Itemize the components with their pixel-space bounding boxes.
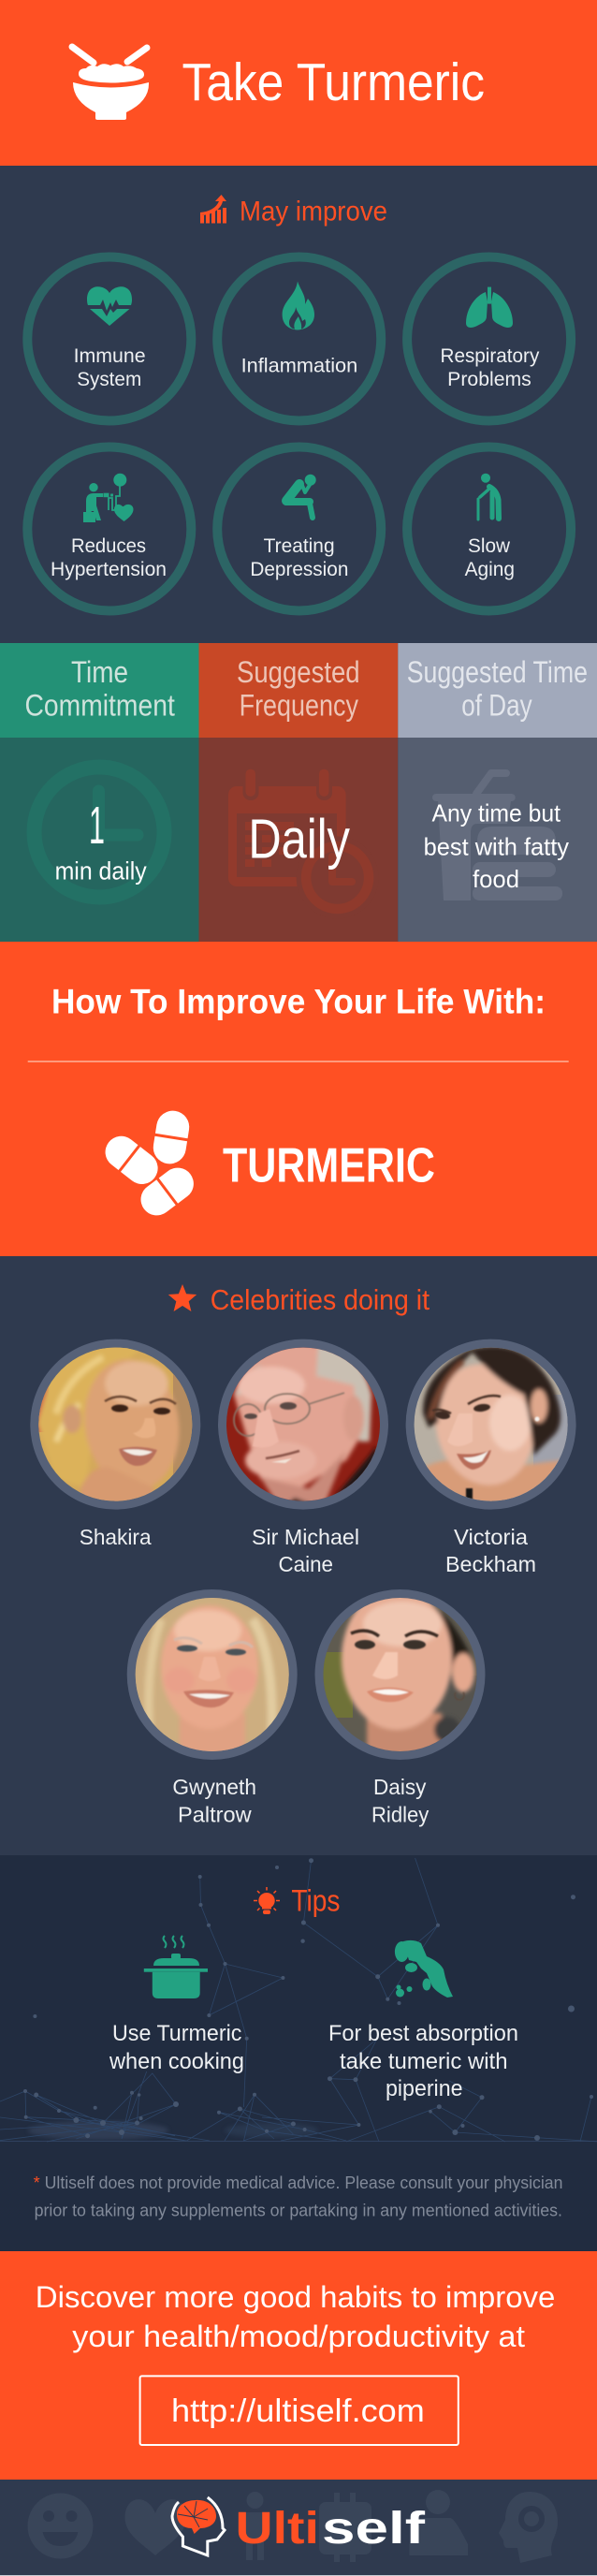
label: Inflammation [241, 356, 357, 377]
heading: suggested frequency: Frequency [240, 689, 358, 723]
label: Slow [468, 535, 511, 557]
panel: suggested time of day [398, 643, 597, 942]
label: System [77, 369, 141, 390]
heading: tips: Tips [291, 1884, 341, 1918]
portrait: Daisy Ridley [314, 1588, 485, 1760]
label: Victoria Beckham: Victoria [454, 1525, 528, 1549]
wordmark: Ulti [236, 2504, 319, 2554]
icon: ghost chip [319, 2493, 371, 2562]
portrait: Shakira [30, 1339, 200, 1510]
icon: flame [283, 281, 314, 329]
panel: footer [0, 2480, 597, 2576]
panel: may improve [0, 166, 597, 643]
label: Problems [447, 369, 531, 390]
heading: time commitment: Commitment [24, 689, 175, 723]
value: any time but best with fatty food: Any time but [432, 799, 561, 827]
benefit: slow aging [407, 447, 571, 610]
label: Gwyneth Paltrow: Gwyneth [172, 1775, 256, 1799]
label: Depression [250, 559, 348, 580]
panel: header [0, 0, 597, 166]
icon: rising chart arrow [200, 195, 226, 223]
portrait: Gwyneth Paltrow [127, 1589, 298, 1760]
benefit: reduces hypertension [27, 447, 191, 610]
icon: heart with pulse [87, 286, 132, 326]
disclaimer: * Ultiself does not provide medical advice. Please consult your physician [34, 2174, 572, 2192]
label: Treating [264, 535, 335, 557]
label: Aging [465, 559, 515, 580]
heading: suggested time of day: of Day [461, 689, 532, 723]
panel: how to improve [0, 942, 597, 1256]
heading: turmeric: TURMERIC [223, 1138, 435, 1193]
icon: lungs [466, 287, 513, 328]
heading: celebrities doing it: Celebrities doing it [211, 1283, 430, 1316]
tip: best absorption with piperine: piperine [386, 2076, 462, 2101]
label: Hypertension [51, 559, 167, 580]
label: Victoria Beckham: Beckham [445, 1552, 536, 1576]
label: Sir Michael Caine: Sir Michael [252, 1525, 359, 1549]
icon: ghost person with tie [241, 2492, 269, 2560]
icon: blood pressure check [83, 474, 133, 522]
text: discover more good habits: your health/mood/productivity at [72, 2320, 525, 2353]
label: Immune [74, 345, 146, 367]
tip: best absorption with piperine: For best absorption [328, 2021, 518, 2046]
value: 1 min daily: min daily [55, 856, 147, 885]
text: discover more good habits: Discover more good habits to improve [36, 2280, 555, 2314]
label: Sir Michael Caine: Caine [279, 1552, 333, 1576]
portrait: Sir Michael Caine [218, 1339, 388, 1510]
icon: sad seated person [286, 475, 316, 518]
icon: ghost person [410, 2490, 468, 2555]
icon: ghost head with gear [499, 2492, 558, 2563]
benefit: immune system [27, 256, 191, 421]
heading: suggested frequency: Suggested [237, 655, 360, 689]
icon: calendar and clock watermark [228, 769, 379, 919]
panel: tips [0, 1855, 597, 2251]
icon: elderly person with cane [478, 474, 499, 520]
button: ultiself url: http://ultiself.com [171, 2393, 425, 2429]
icon: ghost heart [125, 2499, 186, 2555]
panel: suggested frequency [198, 643, 398, 942]
icon: fast food watermark [432, 773, 562, 900]
benefit: treating depression [217, 447, 381, 610]
tip: best absorption with piperine: take tumeric with [340, 2049, 507, 2074]
value: any time but best with fatty food: best with fatty [424, 832, 569, 860]
icon: rice bowl with chopsticks [72, 47, 149, 120]
benefit: inflammation [217, 256, 381, 421]
value: 1 min daily: 1 [89, 796, 105, 856]
portrait: Victoria Beckham [406, 1339, 576, 1510]
label: Daisy Ridley: Daisy [373, 1775, 427, 1799]
value: 1 min daily [55, 796, 147, 885]
benefit: respiratory problems [407, 256, 571, 421]
panel: call to action [0, 2251, 597, 2480]
heading: may improve: May improve [240, 197, 387, 227]
title: Take Turmeric [182, 52, 485, 112]
icon: star [168, 1284, 197, 1311]
icon: three capsules [97, 1108, 201, 1224]
label: Shakira: Shakira [80, 1525, 152, 1549]
icon: clock watermark [34, 768, 165, 897]
icon: cooking pot [144, 1936, 208, 1998]
value: any time but best with fatty food: food [473, 865, 519, 893]
label: Respiratory [440, 345, 540, 367]
icon: head outline with brain [172, 2497, 225, 2555]
heading: how to improve your life with: How To Improve Your Life With: [51, 982, 546, 1020]
panel: celebrities [30, 1284, 576, 1827]
wordmark: self [322, 2504, 426, 2554]
label: Daisy Ridley: Ridley [371, 1803, 430, 1827]
label: Reduces [71, 535, 146, 557]
icon: ghost smiley [28, 2494, 94, 2559]
value: daily: Daily [248, 809, 350, 871]
panel: time commitment [0, 643, 198, 942]
button: ultiself url [140, 2376, 459, 2445]
disclaimer: prior to taking any supplements or partaking in any mentioned activities. [35, 2202, 562, 2220]
tip: use turmeric when cooking: when cooking [109, 2049, 244, 2074]
label: Gwyneth Paltrow: Paltrow [178, 1803, 252, 1827]
tip: use turmeric when cooking: Use Turmeric [112, 2021, 241, 2046]
icon: light bulb [254, 1887, 280, 1914]
icon: turmeric root [395, 1940, 453, 1998]
logo: ultiself [172, 2497, 426, 2555]
heading: time commitment: Time [71, 655, 128, 689]
